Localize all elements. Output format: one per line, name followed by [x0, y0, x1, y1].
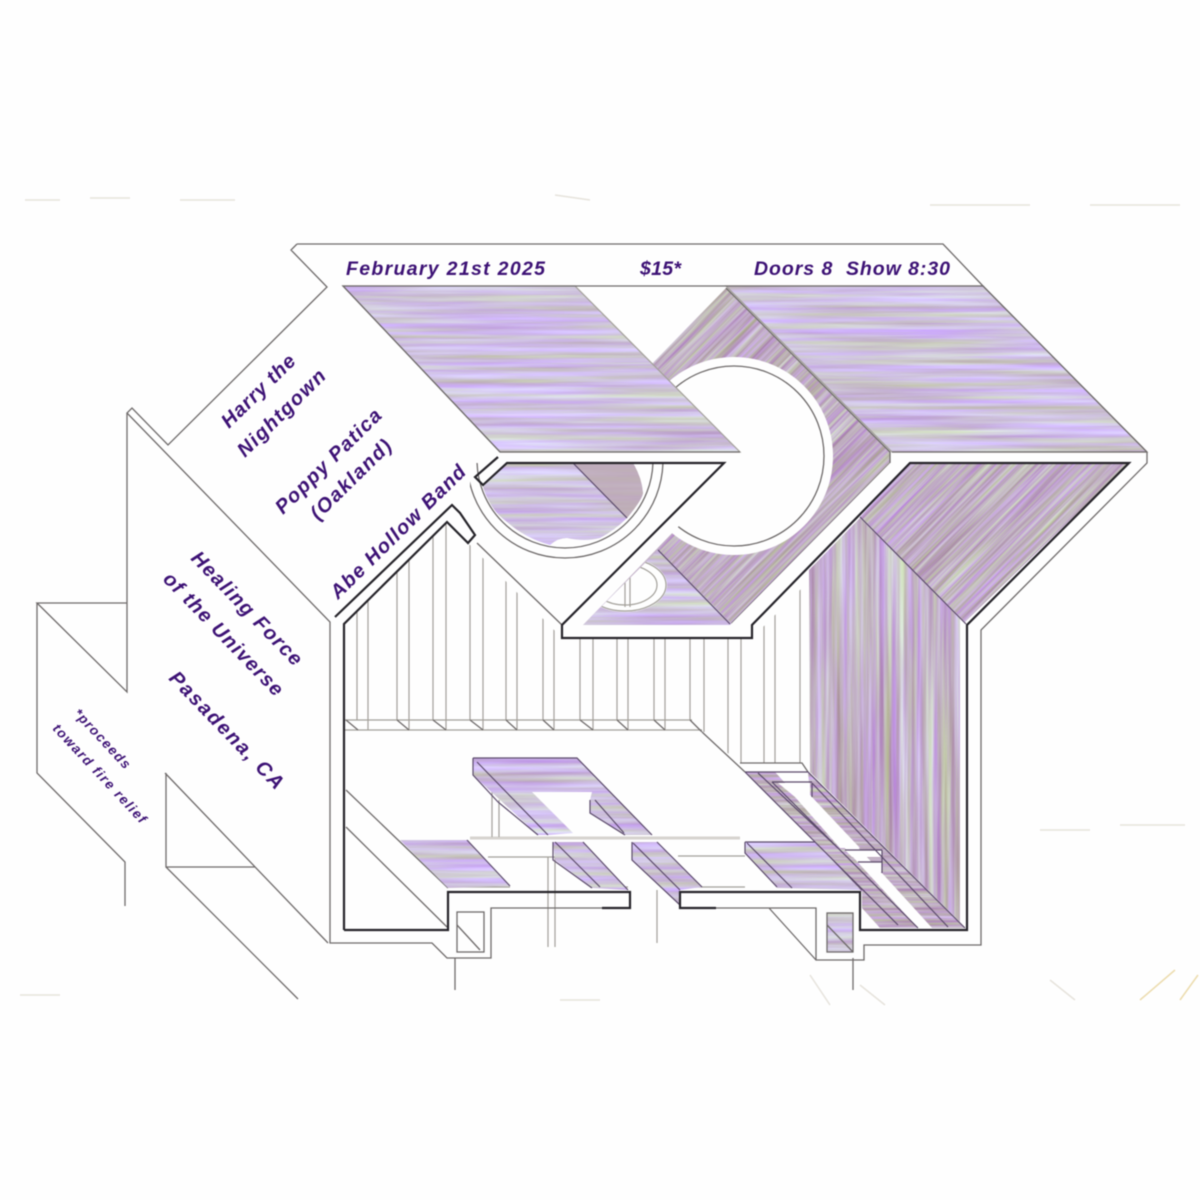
bench: front left outline [467, 840, 510, 886]
text: band Healing Force of the Universe: Healing Force [186, 547, 306, 670]
bench: front right block [745, 842, 860, 890]
text: price: $15* [639, 258, 682, 280]
text: date: February 21st 2025 [346, 258, 546, 280]
large circular opening [635, 357, 833, 555]
text: fine print: toward fire relief [50, 721, 150, 827]
thick inner section line [335, 457, 1129, 930]
text: location: Pasadena, CA [164, 667, 288, 794]
panel: top left ceiling [340, 284, 744, 454]
back wall with vertical studs [345, 520, 800, 763]
floor line and stage outlines [346, 732, 808, 947]
bench: front centre left block [553, 842, 628, 890]
bench: right long rail [805, 768, 969, 930]
faint paper marks [20, 195, 1198, 1005]
text: band Poppy Patica: (Oakland) [306, 435, 397, 525]
panel: lower triangle with small circle [584, 549, 732, 626]
bench: front left block [400, 840, 509, 888]
text: fine print: *proceeds [71, 706, 134, 772]
text: band Harry the Nightgown: Nightgown [233, 365, 331, 462]
bench: front centre left outline [553, 842, 628, 890]
panel: centre ceiling with large circle [587, 287, 892, 624]
bench: rear block [473, 758, 651, 836]
bench: rail outlines [745, 772, 965, 928]
bench: rear block outline [473, 758, 652, 835]
text: band Harry the Nightgown: Harry the [217, 350, 300, 433]
bench: rail white stripes [778, 783, 932, 928]
right support post section [825, 911, 855, 990]
benches: tinted stage blocks [395, 755, 969, 930]
panel: lower right ceiling [859, 464, 1126, 625]
outer building outline [37, 244, 1147, 999]
bench: left long rail [740, 768, 922, 930]
bench: front centre right outline [632, 842, 702, 905]
bench: front centre right block [632, 842, 702, 903]
panel: top right ceiling [720, 284, 1150, 454]
panel: right side wall [808, 518, 960, 922]
white diagonal beam across the ceiling [562, 463, 752, 638]
text: door and show times: Doors 8 Show 8:30 [754, 258, 950, 280]
left support post section [455, 912, 484, 990]
text: band Poppy Patica: Poppy Patica [271, 405, 386, 519]
white cover behind the lower opening [470, 463, 724, 625]
panel: opening with lower circle [469, 462, 664, 560]
white diagonal beam on the right [730, 463, 910, 625]
white lintel under the left ceiling [500, 452, 740, 463]
text: band Abe Hollow Band: Abe Hollow Band [325, 460, 471, 604]
text: band Healing Force of the Universe: of the Universe [158, 568, 287, 701]
bench: front right outline [745, 842, 818, 888]
